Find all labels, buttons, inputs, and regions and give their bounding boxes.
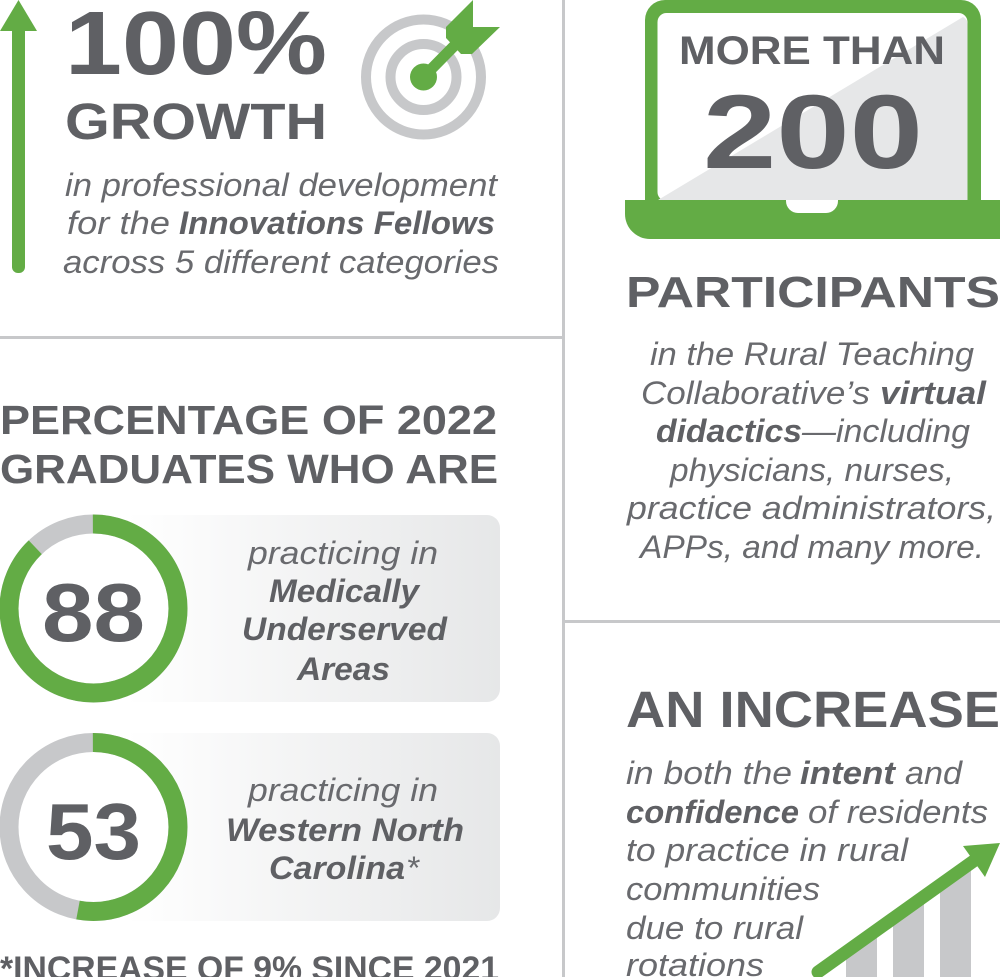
text: virtual didactics description: didactics: [656, 413, 802, 449]
text: professional development description: Innovations Fellows: [179, 205, 495, 241]
icon: laptop with more than 200: [625, 0, 1000, 239]
text: intent and confidence description: confidence: [626, 794, 799, 830]
heading: 100% growth: GROWTH: [65, 93, 327, 150]
text: western north carolina: Carolina: [269, 850, 405, 886]
text: medically underserved areas: Medically: [269, 573, 421, 609]
card: 53 western north carolina: [9, 733, 500, 921]
text: virtual didactics description: [626, 336, 996, 565]
text: western north carolina: [226, 772, 464, 886]
heading: percentage of 2022 graduates who are: [0, 397, 498, 492]
text: virtual didactics description: in the Rural Teaching: [650, 336, 974, 372]
donut: 53 percent: 53: [46, 787, 141, 876]
text: intent and confidence description: in both the: [626, 755, 792, 791]
icon: laptop with more than 200: 200: [703, 74, 923, 191]
text: intent and confidence description: [626, 755, 988, 977]
text: professional development description: in professional development: [65, 167, 498, 203]
text: virtual didactics description: physicians, nurses,: [669, 452, 954, 488]
text: western north carolina: practicing in: [247, 772, 438, 808]
donut: 88 percent: [9, 524, 178, 693]
text: medically underserved areas: Underserved: [242, 611, 449, 647]
text: virtual didactics description: APPs, and many more.: [638, 529, 984, 565]
text: medically underserved areas: Areas: [296, 651, 390, 687]
text: virtual didactics description: Collaborative’s: [641, 375, 870, 411]
text: intent and confidence description: communities: [626, 871, 820, 907]
text: intent and confidence description: due to rural: [626, 910, 804, 946]
icon: target with dart: [366, 0, 500, 134]
text: western north carolina: Western North: [226, 812, 464, 848]
text: western north carolina: *: [406, 850, 421, 886]
text: virtual didactics description: virtual: [880, 375, 987, 411]
panel: percentage of 2022 graduates: [0, 397, 500, 977]
text: intent and confidence description: and: [905, 755, 963, 791]
text: professional development description: across 5 different categories: [63, 244, 499, 280]
text: intent and confidence description: to practice in rural: [626, 832, 909, 868]
panel: 100% growth: [0, 0, 500, 280]
heading: participants: PARTICIPANTS: [626, 268, 1000, 317]
donut: 88 percent: 88: [42, 566, 145, 659]
text: intent and confidence description: intent: [800, 755, 896, 791]
text: professional development description: for the: [67, 205, 170, 241]
icon: up arrow: [0, 0, 37, 273]
heading: percentage of 2022 graduates who are: PERCENTAGE OF 2022: [0, 397, 497, 443]
icon: laptop with more than 200: MORE THAN: [679, 29, 945, 73]
text: medically underserved areas: [242, 535, 449, 687]
text: professional development description: [63, 167, 499, 280]
panel: more than 200 participants: [625, 0, 1000, 565]
heading: 100% growth: [65, 0, 327, 150]
text: intent and confidence description: of residents: [808, 794, 988, 830]
donut: 53 percent: [9, 742, 178, 912]
heading: an increase: AN INCREASE: [626, 681, 1000, 738]
panel: an increase in intent and confidence: [626, 681, 1000, 977]
chart: rising bars with arrow: [818, 843, 1000, 977]
card: 88 medically underserved areas: [9, 515, 500, 702]
text: virtual didactics description: practice administrators,: [626, 490, 996, 526]
text: medically underserved areas: practicing in: [247, 535, 438, 571]
text: virtual didactics description: —including: [801, 413, 970, 449]
heading: percentage of 2022 graduates who are: GRADUATES WHO ARE: [0, 446, 498, 492]
